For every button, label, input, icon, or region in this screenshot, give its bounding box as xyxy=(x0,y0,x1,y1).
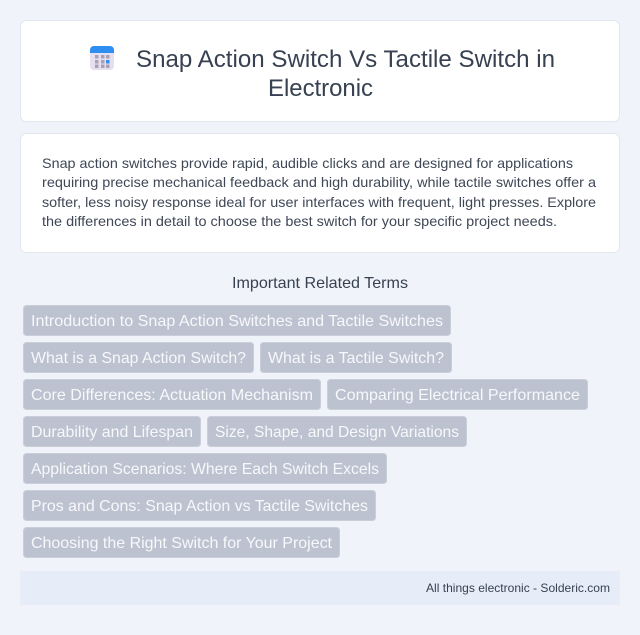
tag 2: What is a Snap Action Switch? xyxy=(31,350,246,367)
tag 6: Durability and Lifespan xyxy=(31,424,193,441)
header panel xyxy=(20,20,620,122)
summary panel xyxy=(20,134,620,252)
tag 7 xyxy=(208,416,466,446)
tag 1: Introduction to Snap Action Switches and Tactile Switches xyxy=(31,313,443,330)
tag 1 xyxy=(24,306,450,336)
tag 8: Application Scenarios: Where Each Switch Excels xyxy=(31,461,379,478)
tag 5 xyxy=(328,380,588,410)
summary text: the differences in detail to choose the best switch for your specific project needs. xyxy=(42,213,557,229)
title: Electronic xyxy=(268,75,373,102)
tag 9 xyxy=(24,490,376,520)
tag 5: Comparing Electrical Performance xyxy=(335,387,580,404)
footer: All things electronic - Solderic.com xyxy=(426,581,610,595)
tag 4 xyxy=(24,380,320,410)
tag 6 xyxy=(24,416,200,446)
tag 9: Pros and Cons: Snap Action vs Tactile Switches xyxy=(31,498,368,515)
section heading: Important Related Terms xyxy=(232,275,408,292)
tag 7: Size, Shape, and Design Variations xyxy=(215,424,459,441)
summary text: softer, less noisy response ideal for user interfaces with frequent, light presses. Explore xyxy=(42,194,596,210)
tag 10 xyxy=(24,528,340,558)
footer xyxy=(20,571,620,605)
title: Snap Action Switch Vs Tactile Switch in xyxy=(136,46,555,73)
summary text xyxy=(42,155,596,229)
tag 3 xyxy=(260,342,452,372)
tag 4: Core Differences: Actuation Mechanism xyxy=(31,387,313,404)
summary text: requiring precise mechanical feedback and high durability, while tactile switches offer a xyxy=(42,174,596,190)
tag 2 xyxy=(24,342,254,372)
title xyxy=(136,46,555,102)
tag list xyxy=(24,306,588,558)
summary text: Snap action switches provide rapid, audible clicks and are designed for applications xyxy=(42,155,573,171)
tag 8 xyxy=(24,454,386,484)
icon: calendar xyxy=(90,46,114,70)
tag 3: What is a Tactile Switch? xyxy=(268,350,444,367)
tag 10: Choosing the Right Switch for Your Project xyxy=(31,535,333,552)
